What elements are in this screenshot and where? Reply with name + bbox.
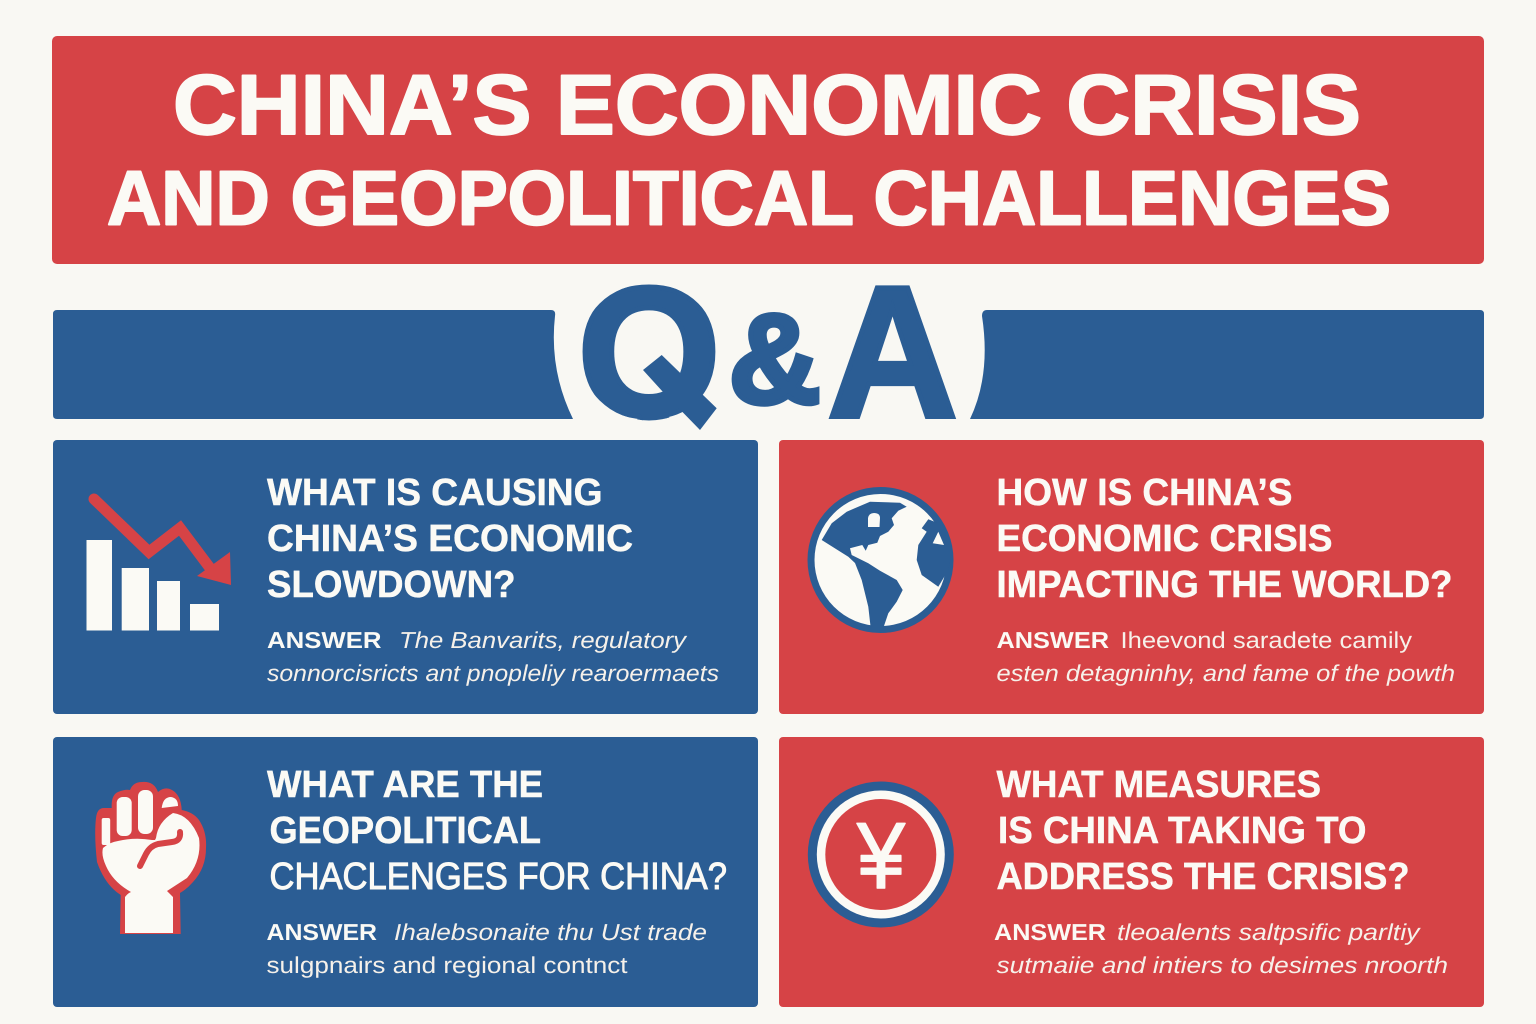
- question heading: GEOPOLITICAL: [270, 810, 541, 852]
- panel: geopolitical challenges question: [53, 737, 758, 1007]
- answer text: sutmaiie and intiers to desimes nroorth: [996, 952, 1448, 978]
- left blue band: [53, 310, 573, 419]
- answer text: tleoalents saltpsific parltiy: [1117, 919, 1421, 945]
- answer text: [996, 627, 1455, 686]
- question heading: [267, 764, 727, 898]
- panel: world impact question: [779, 440, 1484, 714]
- title line 1: CHINA’S ECONOMIC CRISIS: [173, 58, 1361, 153]
- question heading: [996, 472, 1452, 606]
- icon: raised fist: [95, 782, 206, 934]
- answer text: esten detagninhy, and fame of the powth: [996, 660, 1455, 686]
- panel: title banner: [52, 36, 1484, 264]
- right blue band: [970, 310, 1484, 419]
- panel: economic slowdown question: [53, 440, 758, 714]
- question heading: HOW IS CHINA’S: [996, 472, 1292, 514]
- icon: yuan coin: ¥: [856, 803, 906, 908]
- Q&A heading: Q: [578, 248, 721, 454]
- question heading: ECONOMIC CRISIS: [996, 518, 1332, 560]
- question heading: [996, 764, 1410, 898]
- question heading: WHAT IS CAUSING: [267, 472, 602, 514]
- Q&A heading: [582, 284, 956, 430]
- question heading: ADDRESS THE CRISIS?: [996, 856, 1410, 898]
- answer text: ANSWER: [994, 919, 1106, 945]
- question heading: WHAT MEASURES: [996, 764, 1321, 806]
- answer text: [994, 919, 1448, 978]
- question heading: IS CHINA TAKING TO: [998, 810, 1366, 852]
- icon: falling bar chart with arrow: [86, 499, 231, 630]
- answer text: ANSWER: [267, 627, 382, 653]
- answer text: ANSWER: [996, 627, 1109, 653]
- question heading: WHAT ARE THE: [267, 764, 543, 806]
- question heading: IMPACTING THE WORLD?: [996, 564, 1452, 606]
- answer text: sonnorcisricts ant pnopleliy rearoermaets: [267, 660, 720, 686]
- Q&A divider band: [53, 248, 1484, 456]
- icon: yuan coin: [808, 782, 954, 928]
- question heading: SLOWDOWN?: [267, 564, 516, 606]
- answer text: The Banvarits, regulatory: [399, 627, 688, 653]
- answer text: Iheevond saradete camily: [1120, 627, 1413, 653]
- question heading: CHACLENGES FOR CHINA?: [270, 856, 727, 898]
- Q&A heading: A: [828, 248, 958, 456]
- title line 2: AND GEOPOLITICAL CHALLENGES: [107, 156, 1391, 242]
- answer text: Ihalebsonaite thu Ust trade: [394, 919, 707, 945]
- icon: globe: [808, 487, 954, 633]
- Q&A heading: &: [728, 288, 821, 431]
- question heading: [267, 472, 633, 606]
- answer text: sulgpnairs and regional contnct: [266, 952, 628, 978]
- answer text: [266, 919, 707, 978]
- answer text: [267, 627, 720, 686]
- question heading: CHINA’S ECONOMIC: [267, 518, 633, 560]
- answer text: ANSWER: [266, 919, 377, 945]
- panel: policy measures question: [779, 737, 1484, 1007]
